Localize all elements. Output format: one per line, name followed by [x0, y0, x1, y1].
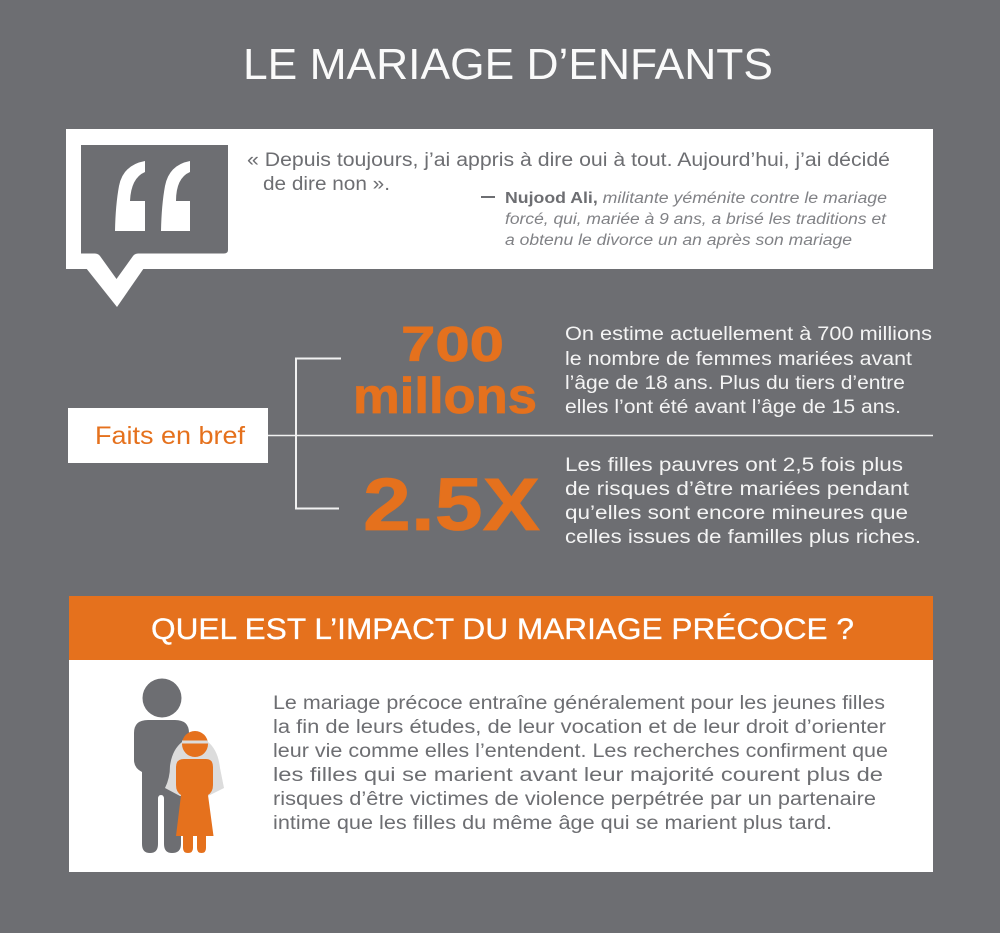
- text: 700 millions description: l’âge de 18 ans. Plus du tiers d’entre: [565, 373, 905, 394]
- quote attribution: Nujood Ali, militante yéménite contre le mariage: [505, 190, 887, 207]
- icon: adult and child bride: [134, 678, 224, 853]
- text: impact description: Le mariage précoce entraîne généralement pour les jeunes filles: [273, 693, 885, 714]
- text: impact description: risques d’être victimes de violence perpétrée par un partenaire: [273, 789, 876, 810]
- quote attribution: [481, 190, 887, 249]
- orange header band: QUEL EST L’IMPACT DU MARIAGE PRÉCOCE ?: [151, 613, 854, 646]
- text: 2.5X description: de risques d’être mariées pendant: [565, 479, 910, 500]
- text: 700 millions description: [565, 324, 932, 418]
- quote panel background: [66, 129, 933, 269]
- panel: key facts: [68, 318, 933, 548]
- stat: 2.5X: 2.5X: [363, 463, 540, 546]
- label box: faits en bref: [68, 408, 268, 463]
- orange header band: [69, 596, 933, 660]
- text: 2.5X description: [565, 455, 921, 548]
- text: 2.5X description: Les filles pauvres ont 2,5 fois plus: [565, 455, 903, 476]
- text: impact description: [273, 693, 888, 834]
- text: 700 millions description: elles l’ont été avant l’âge de 15 ans.: [565, 397, 901, 418]
- icon: speech bubble with quotation marks: [81, 145, 228, 307]
- label box: faits en bref: Faits en bref: [95, 422, 245, 450]
- panel: impact: [69, 596, 933, 872]
- quote text: « Depuis toujours, j’ai appris à dire oui à tout. Aujourd’hui, j’ai décidé: [247, 150, 890, 171]
- text: impact description: leur vie comme elles l’entendent. Les recherches confirment que: [273, 741, 888, 762]
- title: LE MARIAGE D’ENFANTS: [243, 40, 773, 89]
- text: impact description: intime que les filles du même âge qui se marient plus tard.: [273, 813, 832, 834]
- stat: 700 millons: [353, 318, 537, 424]
- text: 2.5X description: qu’elles sont encore mineures que: [565, 503, 908, 524]
- text: impact description: la fin de leurs études, de leur vocation et de leur droit d’orienter: [273, 717, 887, 738]
- text: 700 millions description: On estime actuellement à 700 millions: [565, 324, 932, 345]
- panel: quote: [66, 129, 933, 307]
- white content panel: [69, 660, 933, 872]
- text: impact description: les filles qui se marient avant leur majorité courent plus de: [273, 765, 883, 786]
- connector lines: [268, 358, 933, 508]
- quote attribution: a obtenu le divorce un an après son mariage: [505, 232, 852, 249]
- text: 700 millions description: le nombre de femmes mariées avant: [565, 349, 913, 370]
- text: 2.5X description: celles issues de familles plus riches.: [565, 527, 921, 548]
- quote text: de dire non ».: [263, 174, 390, 195]
- stat: 700 millons: millons: [353, 368, 537, 424]
- stat: 700 millons: 700: [401, 318, 504, 372]
- quote attribution: forcé, qui, mariée à 9 ans, a brisé les traditions et: [505, 211, 887, 228]
- quote text: [247, 150, 890, 195]
